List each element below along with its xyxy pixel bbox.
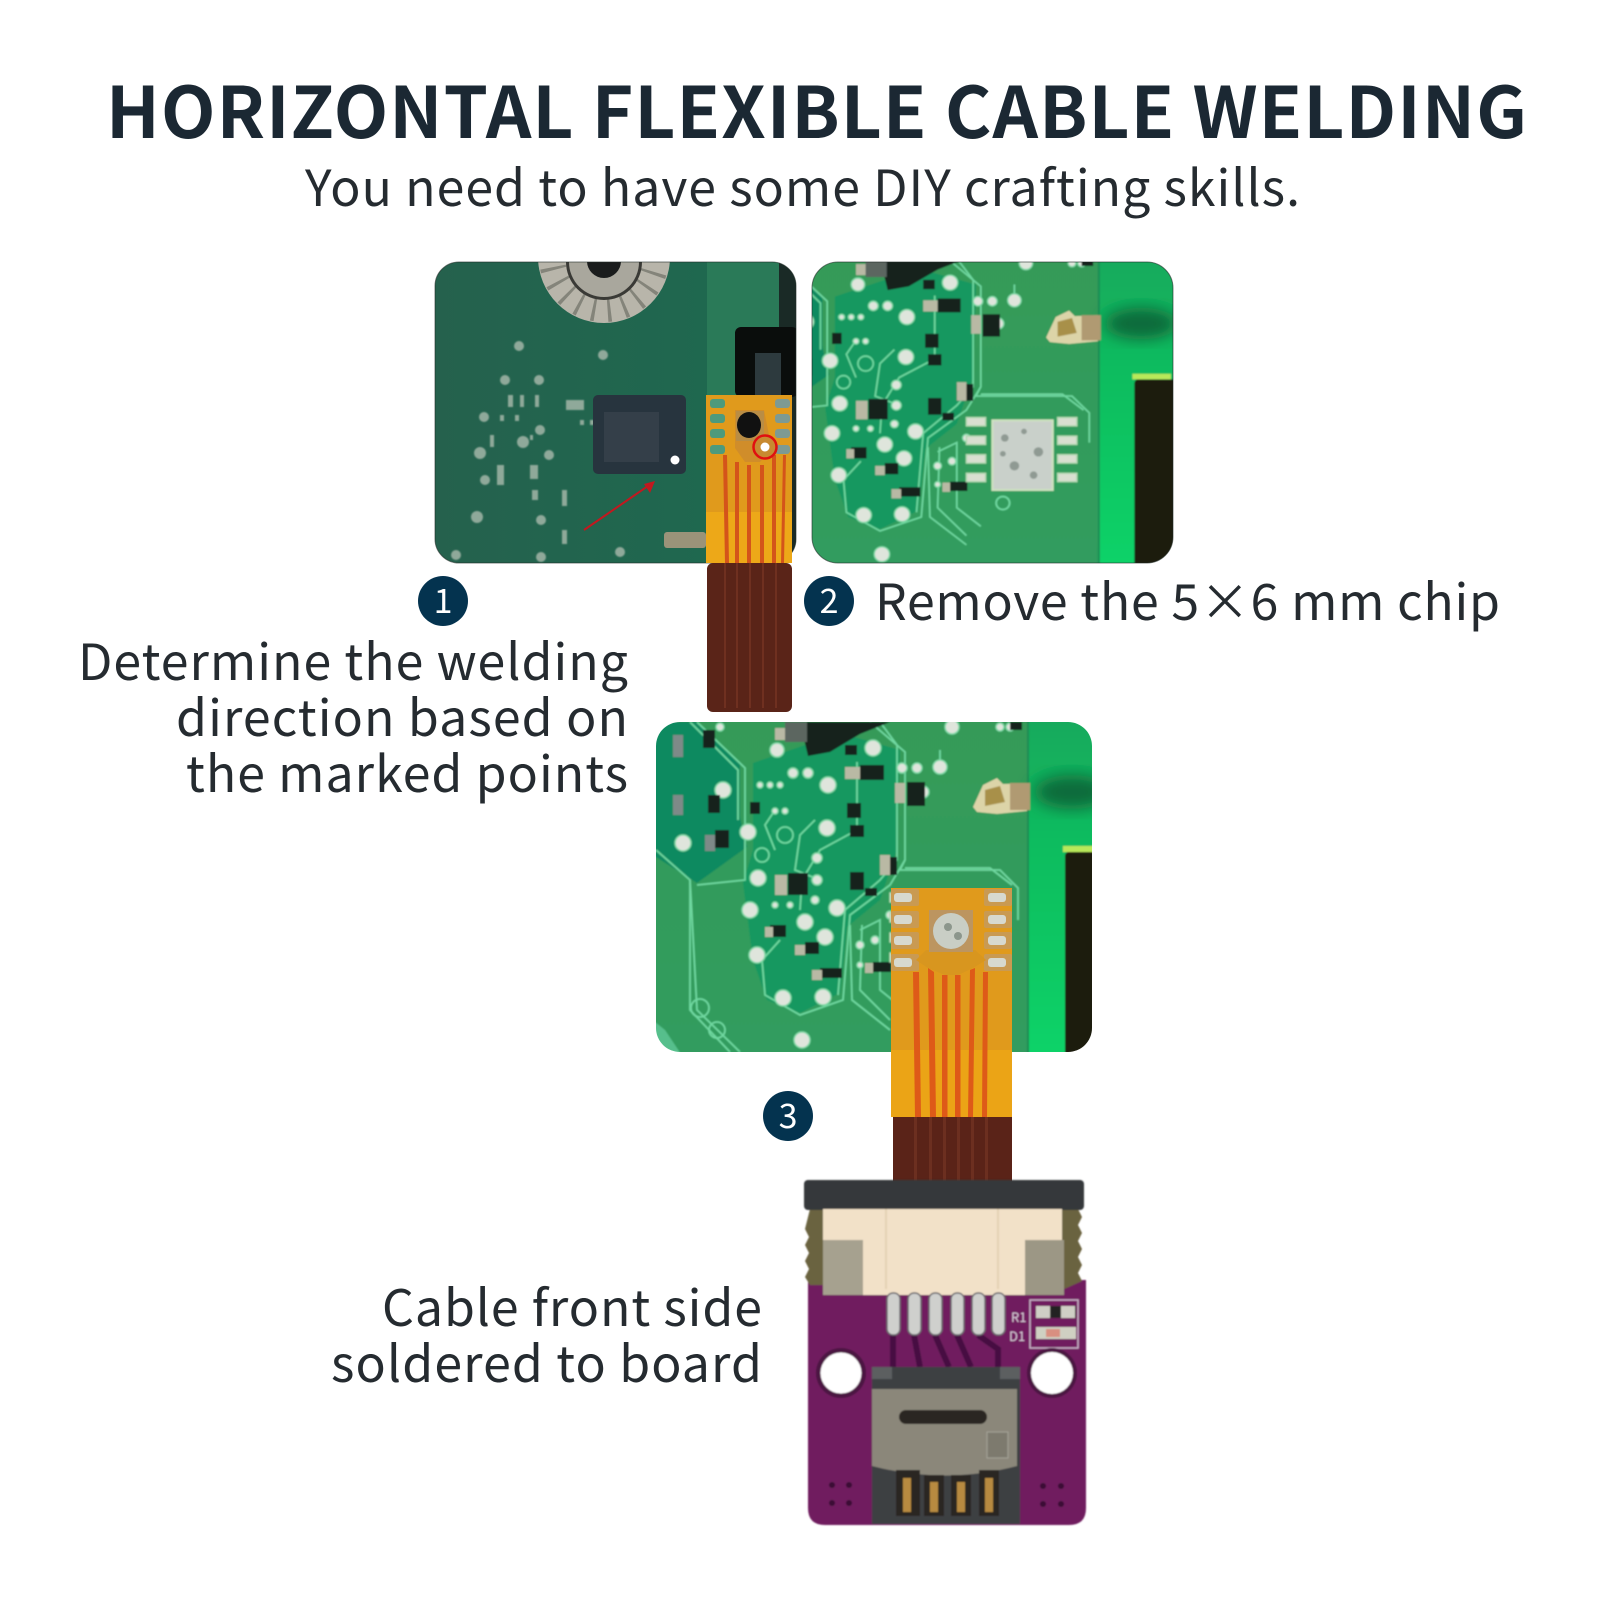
- step number 3: [763, 1089, 813, 1141]
- via dots: [829, 1482, 1064, 1507]
- step number 2: [804, 574, 854, 626]
- marked point on chip: [670, 456, 680, 464]
- small connector: [664, 532, 706, 548]
- step 1 text: direction based on: [176, 679, 628, 751]
- LED and resistor: D1: [1009, 1326, 1025, 1345]
- arrow: [584, 481, 655, 530]
- purple pcb: [808, 1280, 1086, 1525]
- title: HORIZONTAL FLEXIBLE CABLE WELDING: [106, 57, 1527, 159]
- cream connector: [823, 1209, 1062, 1295]
- panel 2: chip removed: [812, 262, 1173, 563]
- step number 3: 3: [779, 1089, 797, 1138]
- step 3 text: soldered to board: [331, 1325, 762, 1397]
- subtitle: You need to have some DIY crafting skills.: [304, 149, 1300, 221]
- LED and resistor: R1: [1011, 1307, 1026, 1326]
- step 1 text: [78, 623, 628, 807]
- step 1 text: the marked points: [186, 735, 628, 807]
- micro SD slot: [872, 1367, 1020, 1524]
- outline of panels 1 and 2: [435, 262, 1173, 563]
- dark board traces: [893, 1335, 998, 1367]
- pins: [887, 1293, 1005, 1335]
- step 1 text: Determine the welding: [78, 623, 628, 695]
- LED and resistor: [1009, 1300, 1078, 1348]
- SD card adapter board: [804, 1180, 1086, 1525]
- step 2 text: Remove the 5×6 mm chip: [875, 563, 1500, 635]
- side pins: [805, 1209, 824, 1285]
- step number 1: 1: [434, 574, 452, 623]
- step number 1: [418, 574, 468, 626]
- washer: [538, 262, 670, 323]
- panel 1: photo of board with chip: [435, 262, 796, 563]
- flexible cable, step 1: [706, 395, 792, 712]
- panel 3: cable soldered: [656, 722, 1092, 1052]
- step 3 text: [331, 1269, 762, 1397]
- marked point on cable: [754, 436, 776, 458]
- mounting holes: [816, 1348, 866, 1398]
- chip: [593, 395, 686, 474]
- step number 2: 2: [820, 574, 838, 623]
- step 3 text: Cable front side: [382, 1269, 762, 1341]
- flexible cable, step 3: [891, 888, 1012, 1182]
- metal tabs: [823, 1240, 863, 1295]
- black top bar: [804, 1180, 1084, 1210]
